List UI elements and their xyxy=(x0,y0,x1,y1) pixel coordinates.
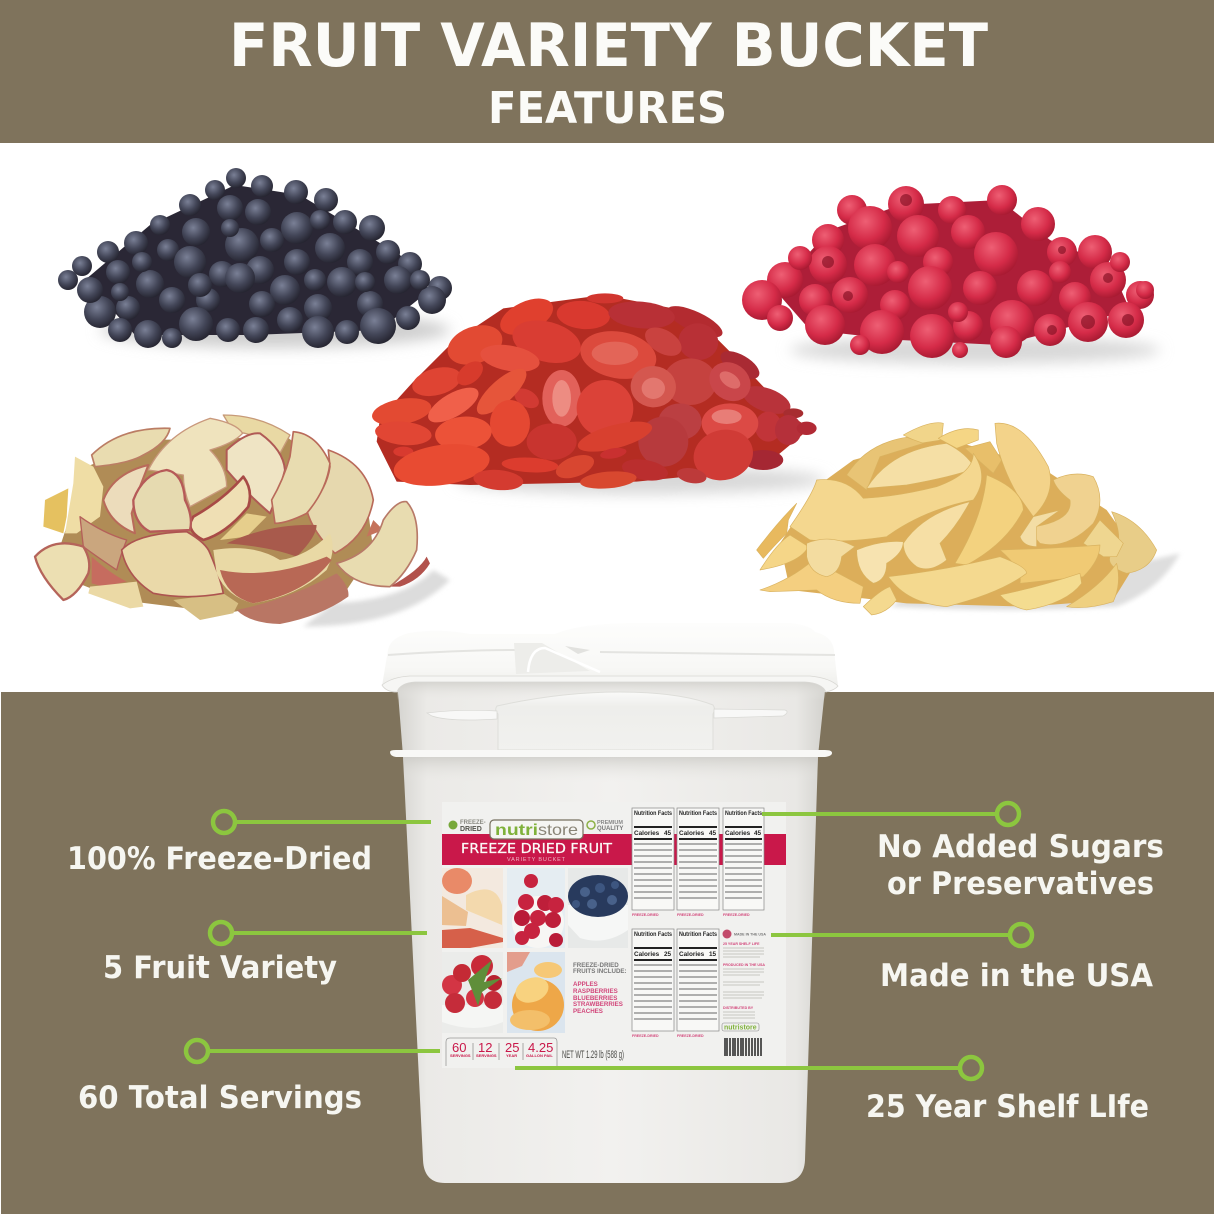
photo: strawberries xyxy=(442,952,503,1033)
callout: 60 Total Servings: 60 Total Servings xyxy=(78,1080,362,1116)
made in USA text column xyxy=(722,930,766,1032)
label sub headline: VARIETY BUCKET xyxy=(507,857,566,863)
nutrition panel 4 xyxy=(632,929,674,1031)
servings stats box: 60 xyxy=(452,1040,466,1055)
fruits included list: RASPBERRIES xyxy=(573,988,618,995)
fruit pile: raspberries xyxy=(742,185,1160,364)
servings stats box xyxy=(446,1038,557,1066)
nutrition panel 5: Calories xyxy=(679,951,705,958)
bucket handle xyxy=(427,692,787,750)
label logo row: PREMIUM xyxy=(597,820,623,826)
servings stats box: 4.25 xyxy=(528,1040,553,1055)
nutrition panels xyxy=(632,808,764,1031)
callout: No Added Sugars or Preservatives: or Preservatives xyxy=(887,866,1154,902)
made in USA text column: 25 YEAR SHELF LIFE xyxy=(723,942,760,946)
peaches and raspberries ingredient captions: FREEZE-DRIED xyxy=(632,1034,659,1038)
nutrition panel 2: Nutrition Facts xyxy=(679,810,717,817)
callout: 60 Total Servings xyxy=(78,1040,440,1116)
nutrition panel 4: 25 xyxy=(664,951,672,958)
product label xyxy=(442,802,786,1068)
fruit pile: peach slices xyxy=(757,423,1180,615)
label headline: FREEZE DRIED FRUIT xyxy=(461,842,612,857)
under-lid shadow xyxy=(397,677,826,700)
shadow under rim xyxy=(403,756,818,782)
callout: Made in the USA: Made in the USA xyxy=(880,958,1153,994)
callout: 5 Fruit Variety xyxy=(103,922,427,986)
fruits included list: BLUEBERRIES xyxy=(573,995,617,1002)
subtitle: FEATURES xyxy=(488,83,727,134)
fruits included list: FREEZE-DRIED xyxy=(573,962,619,969)
label logo row xyxy=(448,820,623,839)
photo: peaches xyxy=(507,952,565,1033)
photo: blueberries xyxy=(568,868,628,948)
nutrition panel 5 xyxy=(677,929,719,1031)
fruit pile: apple slices xyxy=(35,415,450,627)
white freeze-dried fruit bucket xyxy=(382,623,838,1183)
photo: raspberries xyxy=(507,868,565,948)
nutrition panel 3: Calories xyxy=(725,830,751,837)
servings stats box: 25 xyxy=(505,1040,519,1055)
crimson label band xyxy=(442,834,786,865)
label logo row: FREEZE- xyxy=(460,820,486,826)
servings stats box: YEAR xyxy=(506,1053,517,1058)
nutrition panel 1: 45 xyxy=(664,830,672,837)
made in USA text column: PRODUCED IN THE USA xyxy=(723,963,765,967)
nutrition panel 5: Nutrition Facts xyxy=(679,931,717,938)
title: FRUIT VARIETY BUCKET xyxy=(229,11,988,81)
nutrition panel 4: Nutrition Facts xyxy=(634,931,672,938)
callout: No Added Sugars or Preservatives: No Added Sugars xyxy=(877,829,1164,865)
nutrition panel 3: Nutrition Facts xyxy=(725,810,762,817)
nutrition panel 5: 15 xyxy=(709,951,717,958)
callouts xyxy=(67,803,1164,1125)
label logo row: store xyxy=(538,822,578,839)
photo: apples xyxy=(442,868,503,948)
peaches and raspberries ingredient captions: FREEZE-DRIED xyxy=(632,913,659,917)
bucket upper rim ring xyxy=(390,750,832,757)
nutrition panel 3: 45 xyxy=(754,830,762,837)
header banner xyxy=(0,0,1214,143)
lower panel background xyxy=(1,692,1214,1214)
nutrition panel 1: Calories xyxy=(634,830,660,837)
fruits included list: APPLES xyxy=(573,981,598,988)
servings stats box: 12 xyxy=(478,1040,492,1055)
nutrition panel 2: Calories xyxy=(679,830,705,837)
fruits included list xyxy=(573,962,627,1015)
peaches and raspberries ingredient captions xyxy=(632,913,750,1038)
peaches and raspberries ingredient captions: FREEZE-DRIED xyxy=(723,913,750,917)
label logo row: QUALITY xyxy=(597,826,623,832)
bucket body xyxy=(397,680,826,1183)
callout: No Added Sugars or Preservatives xyxy=(762,803,1164,902)
made in USA text column: nutristore xyxy=(724,1024,757,1032)
fruits included list: STRAWBERRIES xyxy=(573,1001,623,1008)
callout: 25 Year Shelf Life: 25 Year Shelf LIfe xyxy=(866,1089,1149,1125)
servings stats box: SERVINGS xyxy=(450,1053,471,1058)
lid pull tab xyxy=(514,643,590,674)
nutrition panel 1: Nutrition Facts xyxy=(634,810,672,817)
label logo row: DRIED xyxy=(460,826,482,833)
made in USA text column: MADE IN THE USA xyxy=(734,932,766,936)
peaches and raspberries ingredient captions: FREEZE-DRIED xyxy=(677,913,704,917)
fruit pile: strawberries xyxy=(370,291,825,494)
fruits included list: FRUITS INCLUDE: xyxy=(573,968,627,975)
nutrition panel 1 xyxy=(632,808,674,910)
callout: 5 Fruit Variety: 5 Fruit Variety xyxy=(103,950,337,986)
bucket lid xyxy=(382,623,838,692)
barcode xyxy=(725,1038,761,1056)
callout: 100% Freeze-Dried xyxy=(67,811,431,877)
nutrition panel 2 xyxy=(677,808,719,910)
nutrition panel 2: 45 xyxy=(709,830,717,837)
peaches and raspberries ingredient captions: FREEZE-DRIED xyxy=(677,1034,704,1038)
callout: 25 Year Shelf Life xyxy=(515,1057,1149,1125)
servings stats box: SERVINGS xyxy=(476,1053,497,1058)
servings stats box: GALLON PAIL xyxy=(526,1053,553,1058)
net weight: NET WT 1.29 lb (588 g) xyxy=(562,1049,624,1061)
fruit pile: blueberries xyxy=(58,168,452,348)
label logo row: nutri xyxy=(495,822,538,839)
fruits included list: PEACHES xyxy=(573,1008,603,1015)
nutrition panel 3 xyxy=(723,808,764,910)
callout: 100% Freeze-Dried: 100% Freeze-Dried xyxy=(67,841,372,877)
made in USA text column: DISTRIBUTED BY xyxy=(723,1006,754,1010)
nutrition panel 4: Calories xyxy=(634,951,660,958)
callout: Made in the USA xyxy=(771,924,1153,994)
